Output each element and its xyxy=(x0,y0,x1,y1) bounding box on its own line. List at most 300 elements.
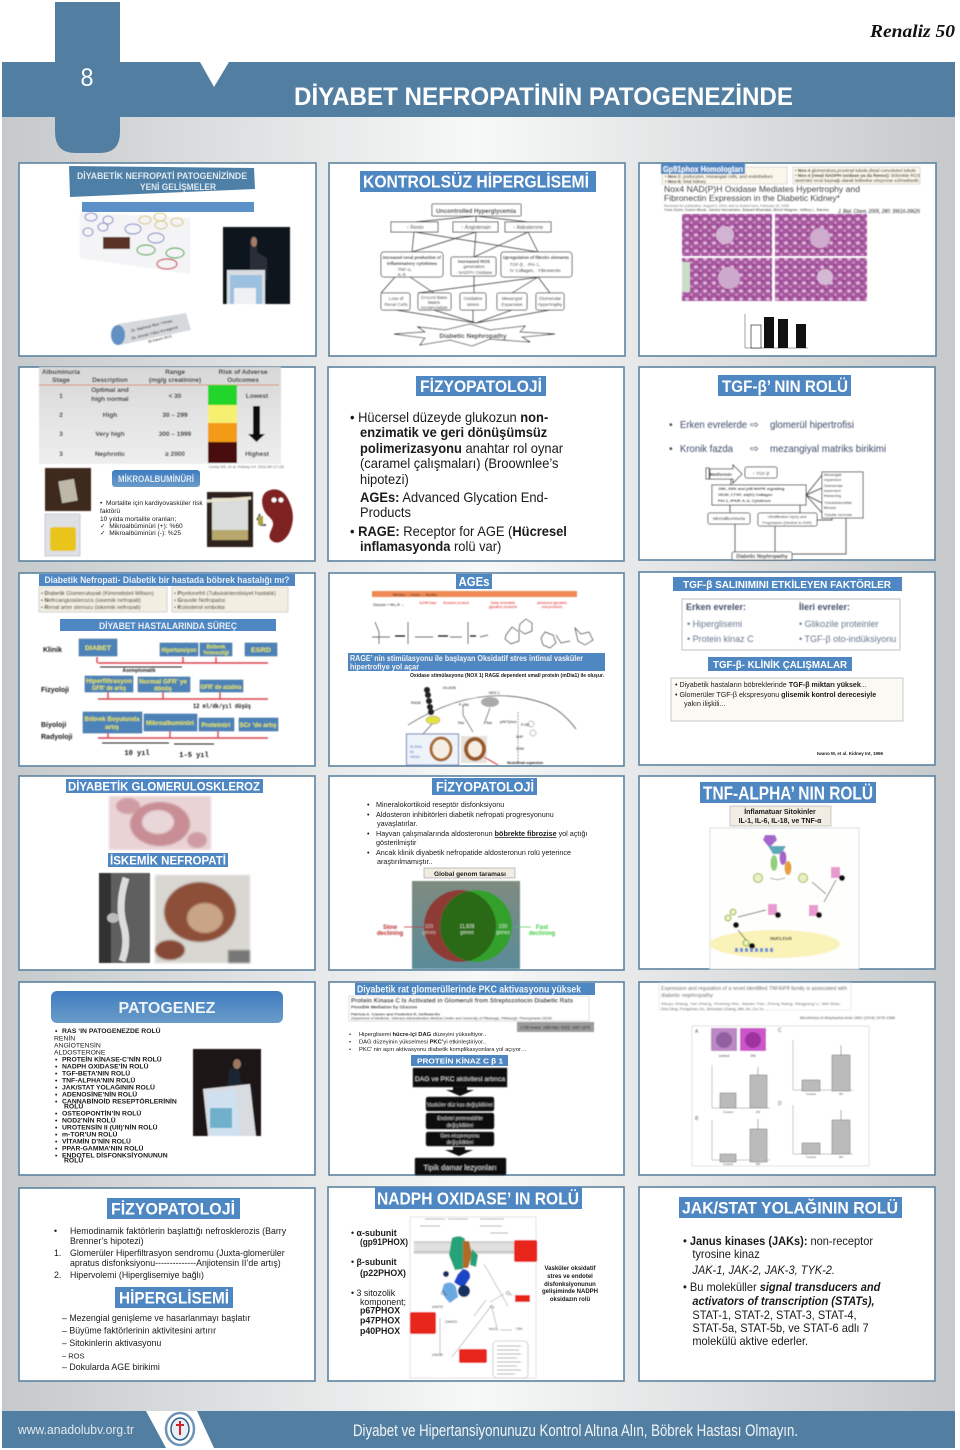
diagnosis boxes: • Piyelonefrit (Tubulointerstisiyel hastalık) xyxy=(174,591,276,597)
timeline: Proteinüri xyxy=(202,722,231,729)
histology image xyxy=(109,796,211,850)
albuminuria table: Stage xyxy=(52,377,70,384)
reaction scheme: end-products xyxy=(542,605,562,609)
vessel cross-sections xyxy=(406,721,543,765)
oxidase diagram: O₂ xyxy=(506,1291,512,1297)
heading: TGF-β’ NIN ROLÜ xyxy=(722,377,848,396)
flow: Endotel permeabilite xyxy=(437,1116,483,1122)
panel: new developments xyxy=(19,163,316,356)
paper citation: J Clin Invest. 1989 Mar; 83(3): 1667-1674 xyxy=(519,1025,590,1030)
albuminuria table: ≥ 2000 xyxy=(165,451,185,458)
subheading xyxy=(411,1055,508,1066)
oxidase diagram: ·OH xyxy=(515,1326,522,1331)
albuminuria table: 1 xyxy=(59,393,63,400)
panel: PKC activation xyxy=(329,982,624,1175)
pathway diagram: Mesangial xyxy=(824,473,841,477)
homolog notes xyxy=(661,163,920,184)
reaction scheme: glycation products xyxy=(489,605,517,609)
row labels xyxy=(41,647,73,741)
vessel cross-sections: Neointimal expansion xyxy=(507,761,543,765)
stage list: • xyxy=(669,420,673,431)
stage list: glomerül hipertrofisi xyxy=(770,420,854,431)
side note xyxy=(542,1266,598,1303)
effects list: – Mezengial genişleme ve hasarlanmayı başlatır xyxy=(62,1313,250,1323)
albuminuria table: Lowest xyxy=(246,393,269,400)
venn diagram: 329 xyxy=(425,924,433,930)
heading xyxy=(51,991,283,1023)
charts figure: C xyxy=(778,1028,782,1034)
charts figure xyxy=(692,1026,869,1166)
list: • xyxy=(55,1056,58,1064)
numbered list: Glomerüler Hiperfiltrasyon sendromu (Juxta-glomerüler xyxy=(70,1248,285,1258)
timeline: Böbrek xyxy=(207,644,226,650)
homolog notes: • Nox-4 (renal NADPH oxidase ya da Renox): Böbrekte ROS xyxy=(795,173,920,178)
pathway diagram: Tubular necrosis xyxy=(824,513,852,517)
timeline: Böbrek Boyutunda xyxy=(84,716,140,723)
albuminuria table: (mg/g creatinine) xyxy=(149,377,201,384)
albuminuria table: Nephrotic xyxy=(95,451,126,458)
body text: • RAGE: Receptor for AGE (Hücresel xyxy=(350,523,567,539)
body text: polimerizasyonu anahtar rol oynar xyxy=(360,440,564,456)
stage list: • xyxy=(669,444,673,455)
process heading: DİYABET HASTALARINDA SÜREÇ xyxy=(99,621,237,631)
list: ROLÜ xyxy=(64,1156,83,1164)
timeline: ESRD xyxy=(251,647,271,654)
mortality text: faktörü xyxy=(100,508,120,515)
homolog notes: • Nox-1: podocytes, mesangial cells, and endothelium xyxy=(665,174,773,179)
subunit list: p67PHOX xyxy=(360,1306,400,1316)
panel: aldosterone pathophysiology xyxy=(329,776,624,970)
badge: MİKROALBUMİNÜRİ xyxy=(118,474,194,484)
oxidase diagram: O₂ xyxy=(490,1304,495,1309)
panel: hemodynamic pathophysiology xyxy=(19,1188,315,1381)
albuminuria table: Range xyxy=(165,369,185,376)
vessel cross-sections: SHP xyxy=(516,735,524,739)
albuminuria table: High xyxy=(103,412,117,419)
bullets: • xyxy=(367,848,370,857)
body text: (caramel çalışmaları) (Broownlee’s xyxy=(360,455,559,471)
factor box xyxy=(682,599,900,650)
pathway diagram: PAI-1, tPAIP, IL-6, Cytokines xyxy=(718,498,771,503)
vessel cross-sections: STAT xyxy=(516,747,525,751)
body text: inflamasyonda rolü var) xyxy=(360,538,501,554)
flowchart: Loss of xyxy=(389,296,404,301)
numbered list: Brenner’s hipotezi) xyxy=(70,1236,144,1246)
cytokine label xyxy=(730,806,831,826)
paper title: Nox4 NAD(P)H Oxidase Mediates Hypertrophy and xyxy=(664,184,860,194)
flowchart: ↑ Aldosterone xyxy=(513,225,543,231)
panel: TNFAIP8 charts xyxy=(639,982,935,1175)
numbered list: Hemodinamik faktörlerin başlattığı nefrosklerozis (Barry xyxy=(70,1226,287,1236)
flowchart: Matrix xyxy=(428,300,441,305)
factor box: • TGF-β oto-indüksiyonu xyxy=(799,634,896,644)
factor box: • Glikozile proteinler xyxy=(799,619,879,629)
flowchart: ↑ Angiotensin xyxy=(461,225,491,231)
list: UROTENSİN II (UII)’NİN ROLÜ xyxy=(62,1122,158,1132)
paper citation: Department of Medicine, Veterans Administration Medical Center and University of Pittsburgh, Pittsburgh, Pennsylvania 15240 xyxy=(351,1016,552,1020)
albuminuria table: < 30 xyxy=(169,393,182,400)
homolog notes: • Nox-4 glomeruluss,proximal tubule,distal convoluted tubule xyxy=(795,168,916,173)
signalling figure xyxy=(710,828,859,969)
charts figure: control xyxy=(719,1054,729,1058)
stage list: ⇨ xyxy=(750,444,759,455)
flow: değişiklikleri xyxy=(447,1123,473,1129)
timeline: GFR' de azalma xyxy=(200,684,242,691)
author label: Dr. Ahmet Yıldız-Kınagevsi xyxy=(131,324,178,341)
panel: role of TGF-beta xyxy=(639,367,935,560)
bullets: Hayvan çalışmalarında aldosteronun böbrekte fibrozise yol açtığı xyxy=(376,829,587,838)
flowchart: inflammatory cytokines xyxy=(387,261,438,266)
list: ALDOSTERONE xyxy=(54,1050,106,1056)
flow: Tipik damar lezyonları xyxy=(423,1163,497,1172)
author label: Dr. Mahmut İlker Yılmaz xyxy=(130,318,173,333)
flowchart: Hypertrophy xyxy=(538,302,563,307)
number tab xyxy=(55,2,120,153)
albuminuria table xyxy=(39,367,285,469)
panel: diabetic process timeline xyxy=(19,573,315,766)
subunit list: p47PHOX xyxy=(360,1316,400,1326)
banner: YENİ GELİŞMELER xyxy=(140,182,216,192)
flow: değişiklikleri xyxy=(447,1140,473,1146)
bullets: • xyxy=(349,1040,351,1046)
page number: 8 xyxy=(80,64,94,92)
numbered list xyxy=(54,1226,287,1280)
heading: KONTROLSÜZ HİPERGLİSEMİ xyxy=(363,172,589,192)
cytokine label: IL-1, IL-6, IL-18, ve TNF-α xyxy=(739,818,822,825)
vessel cross-sections: mDia1 xyxy=(410,755,420,759)
heading: NADPH OXIDASE’ IN ROLÜ xyxy=(377,1188,579,1208)
side note: oksidazın rolü xyxy=(550,1297,591,1303)
venn diagram: Fast xyxy=(536,925,548,931)
kidney character xyxy=(257,489,293,543)
speaker photo xyxy=(223,227,290,304)
banner xyxy=(69,166,255,197)
body text: hipotezi) xyxy=(360,471,409,487)
panel: pathogenesis list xyxy=(19,982,315,1175)
list: RAS ‘IN PATOGENEZDE ROLÜ xyxy=(62,1026,161,1035)
reaction scheme xyxy=(372,591,593,648)
body text: enzimatik ve geri dönüşümsüz xyxy=(360,424,547,440)
bullets xyxy=(349,1032,527,1053)
reaction scheme: Amadori product xyxy=(443,601,469,605)
oxidase note: Oxidase stimülasyonu (NOX 1) RAGE dependent small protein (mDia1) ile oluşur. xyxy=(410,673,604,679)
pathway diagram: expansion xyxy=(824,478,841,482)
list: • xyxy=(55,1146,58,1152)
RAGE heading xyxy=(348,653,605,672)
charts figure: Control xyxy=(723,1110,733,1114)
mortality text xyxy=(100,500,203,537)
homolog notes: üretimini renal kaynağı olarak böbrekte ekspirese edilmektedir. xyxy=(795,178,920,183)
page title: DİYABET NEFROPATİNİN PATOGENEZİNDE xyxy=(294,83,793,111)
flow: DAG ve PKC aktivitesi artınca xyxy=(415,1076,505,1083)
paper citation: Patricia A. Craven and Frederick R. DeRubertis xyxy=(351,1012,441,1016)
bullets: • xyxy=(349,1047,351,1053)
body text: molekülü aktive ederler. xyxy=(692,1336,808,1348)
mortality text: 10 yılda mortalite oranları; xyxy=(100,516,176,523)
albuminuria table: Description xyxy=(92,377,128,384)
list: • xyxy=(55,1152,58,1160)
list: ANGİOTENSİN xyxy=(54,1040,101,1050)
author label xyxy=(111,313,191,345)
body text: • Janus kinases (JAKs): non-receptor xyxy=(683,1236,873,1248)
RAGE signalling diagram: NOX 1 xyxy=(489,691,500,695)
venn diagram: Slow xyxy=(383,925,397,931)
urine cup photo xyxy=(207,492,253,547)
pathway diagram: Glomerular xyxy=(824,484,844,488)
list: ADENOSİNE’NİN ROLÜ xyxy=(62,1090,137,1098)
footer band xyxy=(2,1411,955,1448)
bullets: araştırılmamıştır.. xyxy=(377,857,433,866)
angiography image xyxy=(99,873,150,963)
albuminuria table: Optimal and xyxy=(91,387,129,394)
flowchart: Oxidative xyxy=(464,296,483,301)
pathway diagram: Metformin xyxy=(710,472,732,477)
flowchart: Upregulation of fibrotic elements xyxy=(503,255,569,260)
effects list: – Büyüme faktörlerinin aktivitesini artırır xyxy=(62,1326,216,1336)
mortality text: ✓ Mikroalbüminüri (-): %25 xyxy=(100,530,181,537)
flowchart: · IL-6 xyxy=(395,272,406,277)
pathway diagram: fibrosis xyxy=(824,506,836,510)
venn diagram: genes xyxy=(496,930,510,936)
clinical box: yakın ilişkili... xyxy=(684,700,725,708)
citation: Iwano M, et al. Kidney Int, 1996 xyxy=(817,751,884,756)
factor box: • Hiperglisemi xyxy=(687,619,742,629)
author label: 30 Kasım 2013 xyxy=(148,334,172,344)
paper citation: Biochimica et Biophysica Acta 1862 (2016) 1978-1988 xyxy=(800,1015,896,1020)
charts figure: DN xyxy=(750,1054,756,1058)
pathway diagram: Ultrafiltration injury and xyxy=(768,515,806,519)
diagnosis boxes: • Nefroangiosklerozis (iskemik nefropati) xyxy=(41,598,141,604)
venn diagram: declining xyxy=(377,931,403,937)
clinical box xyxy=(671,678,903,721)
bullets xyxy=(367,800,587,866)
timeline: 1-5 yıl xyxy=(179,752,209,760)
list: VİTAMİN D’NİN ROLÜ xyxy=(62,1136,131,1146)
venn diagram: genes xyxy=(422,930,436,936)
bullets: Aldosteron inhibitörleri diabetik nefropati progresyonunu xyxy=(376,810,554,819)
reaction scheme: advanced glycation xyxy=(537,601,567,605)
albuminuria table: Risk of Adverse xyxy=(219,369,268,376)
body text xyxy=(683,1236,881,1348)
header notch xyxy=(200,62,229,87)
timeline: DIABET xyxy=(85,645,111,652)
subunit list: (gp91PHOX) xyxy=(360,1237,408,1247)
reaction scheme: Early reversible xyxy=(491,601,515,605)
RAGE signalling diagram: P-JNK xyxy=(459,703,470,707)
paper citation: Protein Kinase C Is Activated in Glomeruli from Streptozotocin Diabetic Rats xyxy=(351,998,574,1004)
charts figure: DN xyxy=(839,1092,843,1096)
pathway diagram: basement xyxy=(824,489,842,493)
vessel cross-sections: SI RNA xyxy=(410,745,422,749)
flowchart: Expansion xyxy=(501,302,523,307)
paper citation: Expression and regulation of a novel identified TNFAIP8 family is associated with xyxy=(661,986,847,992)
genome label xyxy=(424,868,515,878)
RAGE signalling diagram: RAGE xyxy=(411,701,422,705)
body text: tyrosine kinaz xyxy=(692,1249,760,1261)
panel: NADPH oxidase xyxy=(328,1187,624,1381)
row labels: Fizyoloji xyxy=(41,687,69,694)
charts figure: Control xyxy=(806,1092,816,1096)
RAGE signalling diagram: Rac xyxy=(486,721,492,725)
pathway diagram xyxy=(706,465,863,560)
effects list: – Dokularda AGE birikimi xyxy=(62,1362,160,1372)
timeline: 10 yıl xyxy=(124,750,150,758)
body text: Products xyxy=(360,504,411,520)
flowchart: Mesangial xyxy=(502,296,522,301)
bullets: Ancak klinik diyabetik nefropatide aldosteronun rolü yeterince xyxy=(376,848,571,857)
panel: pathophysiology AGEs xyxy=(328,367,624,561)
heading: Diabetik Nefropati- Diabetik bir hastada böbrek hastalığı mı? xyxy=(44,575,290,585)
RAGE heading: hipertrofiye yol açar xyxy=(350,662,419,672)
row labels: Radyoloji xyxy=(41,734,73,741)
body text: activators of transcription (STATs), xyxy=(692,1296,875,1308)
stage list: mezangiyal matriks birikimi xyxy=(770,444,886,455)
albuminuria table: Very high xyxy=(95,431,125,438)
bullets: • xyxy=(349,1032,351,1038)
charts figure: DN xyxy=(839,1155,843,1159)
bullets: PKC’ nin aşırı aktivasyonu diabetik komplikasyonlara yol açıyor… xyxy=(359,1047,527,1053)
list: • xyxy=(55,1124,58,1132)
paper citation: Sha Ding, Pengchao Jin, Jinhuiyao Zhang, Mei Jin, Gu Yu xyxy=(661,1006,764,1011)
flowchart: stress xyxy=(467,302,480,307)
albuminuria table: 30 – 299 xyxy=(162,412,188,419)
side note: stres ve endotel xyxy=(547,1274,593,1280)
footer url: www.anadolubv.org.tr xyxy=(17,1423,134,1437)
body text: STAT-5a, STAT-5b, ve STAT-6 adlı 7 xyxy=(692,1323,869,1335)
oxidase diagram: ONOO xyxy=(445,1319,457,1324)
side note: Vasküler oksidatif xyxy=(544,1266,597,1272)
heading: TNF-ALPHA’ NIN ROLÜ xyxy=(703,782,873,804)
paper citation: Possible Mediation by Glucose xyxy=(351,1004,418,1010)
charts figure: DN xyxy=(756,1162,760,1166)
mortality text: ✓ Mikroalbüminüri (+): %60 xyxy=(100,523,183,530)
subunit list xyxy=(351,1228,408,1336)
panel: glomerulosclerosis xyxy=(19,776,315,970)
stage list xyxy=(669,420,886,455)
paper title: Received for publication, August 6, 2004, and in revised form, February 18, 2005 xyxy=(664,204,789,208)
timeline: Hipertansiyon xyxy=(162,647,197,654)
flowchart: Increased renal production of xyxy=(383,255,441,260)
row labels: Klinik xyxy=(43,647,62,654)
list: • xyxy=(55,1110,58,1118)
list: • xyxy=(55,1078,58,1084)
flowchart: ↑ Renin xyxy=(407,225,424,231)
venn diagram: 11,828 xyxy=(460,924,475,930)
oxidase diagram: O₂ xyxy=(441,1291,447,1297)
charts figure: D xyxy=(778,1101,782,1107)
stage list: Erken evrelerde xyxy=(680,420,747,431)
list: • xyxy=(55,1098,58,1106)
oxidase diagram: eNOS xyxy=(432,1304,443,1309)
timeline: 12 ml/dk/yıl düşüş xyxy=(193,703,251,710)
effects list xyxy=(62,1313,250,1372)
subunit list: • α-subunit xyxy=(351,1228,397,1238)
heading: FİZYOPATOLOJİ xyxy=(420,377,542,396)
albuminuria table: Albuminuria xyxy=(42,369,80,376)
heading: PATOGENEZ xyxy=(119,1000,216,1017)
row labels: Biyoloji xyxy=(41,722,66,729)
mortality text: • Mortalite için kardiyovasküler risk xyxy=(100,500,203,507)
albuminuria table: Highest xyxy=(245,451,270,458)
albuminuria table: 3 xyxy=(59,431,63,438)
oxidase diagram xyxy=(410,1217,537,1378)
stage list: Kronik fazda xyxy=(680,444,733,455)
numbered list: Hipervolemi (Hiperglisemiye bağlı) xyxy=(70,1270,204,1280)
patient sample photos xyxy=(45,468,91,556)
flowchart: Renal Cells xyxy=(384,302,408,307)
flowchart xyxy=(381,204,572,346)
timeline: Asemptomatik xyxy=(122,668,156,674)
list: • xyxy=(55,1132,58,1138)
heading: Diyabetik rat glomerüllerinde PKC aktivasyonu yüksek xyxy=(357,984,581,996)
side note: disfonksiyonunun xyxy=(544,1282,596,1288)
pathway diagram: Tubulointerstitial xyxy=(824,501,852,505)
pathway diagram: VEGF, CTGF, α3(IV) Collagen xyxy=(718,492,773,497)
bullets: Hiperglisemi hücre-içi DAG düzeyini yükseltiyor.. xyxy=(359,1032,486,1038)
charts figure: Control xyxy=(723,1162,733,1166)
diagnosis boxes: • Gravide Nefropatisi xyxy=(174,598,225,604)
panel: TGF-beta factors xyxy=(639,572,935,765)
numbered list: 2. xyxy=(54,1270,61,1280)
blue bar xyxy=(82,202,254,212)
body text: JAK-1, JAK-2, JAK-3, TYK-2. xyxy=(691,1265,835,1277)
panel: uncontrolled hyperglycemia xyxy=(329,163,625,356)
side note: gelişiminde NADPH xyxy=(542,1289,598,1295)
flowchart: · TGF-β, · PAI-1, xyxy=(507,262,540,267)
paper title xyxy=(664,184,921,215)
list: TNF-ALPHA’NIN ROLÜ xyxy=(62,1076,135,1084)
panel: AGEs xyxy=(329,573,624,766)
list: • xyxy=(55,1138,58,1146)
bullets: Mineralokortikoid reseptör disfonksiyonu xyxy=(376,800,504,809)
subunit list: komponent; xyxy=(360,1297,406,1307)
albuminuria table: 2 xyxy=(59,412,63,419)
footer logo xyxy=(166,1413,194,1445)
heading: FİZYOPATOLOJİ xyxy=(436,780,534,794)
charts figure: A xyxy=(695,1029,699,1035)
list: • xyxy=(55,1064,58,1070)
pathway diagram: Microalbuminuria xyxy=(713,516,746,521)
paper title: J. Biol. Chem. 2005, 280: 39616-39626 xyxy=(837,209,921,215)
genome label: Global genom taraması xyxy=(434,871,506,878)
list: PROTEİN KİNASE-C’NİN ROLÜ xyxy=(62,1054,162,1064)
RAGE signalling diagram: pAKTphos xyxy=(500,720,517,724)
list: CANNABİNOİD RESEPTÖRLERİNİN xyxy=(62,1096,177,1106)
timeline: GFR' de artış xyxy=(92,685,126,692)
list: RENİN xyxy=(54,1034,75,1042)
timeline: Yetmezliği xyxy=(203,650,229,656)
effects list: – Sitokinlerin aktivasyonu xyxy=(62,1338,161,1348)
panel: microalbuminuria xyxy=(19,367,315,561)
diagnosis boxes xyxy=(39,587,288,612)
heading: TGF-β SALINIMINI ETKİLEYEN FAKTÖRLER xyxy=(683,578,891,591)
body text: STAT-1, STAT-2, STAT-3, STAT-4, xyxy=(692,1310,857,1322)
paper citation: diabetic nephropathy xyxy=(661,993,713,999)
flowchart: · IV Collagen, · Fibronectin xyxy=(507,268,561,273)
venn diagram: declining xyxy=(529,931,555,937)
charts figure: Control xyxy=(806,1155,816,1159)
vessel cross-sections: for xyxy=(410,750,415,754)
flowchart: generation xyxy=(463,264,485,269)
albuminuria table: Levey AS, et al. Kidney Int. 2011;80:17-28. xyxy=(209,464,285,469)
flowchart: Glomerular xyxy=(539,296,562,301)
clinical studies heading: TGF-β- KLİNİK ÇALIŞMALAR xyxy=(713,658,847,671)
pathway diagram: ↑ TGF-β xyxy=(753,471,770,476)
oxidase diagram: H₂O₂ xyxy=(489,1326,499,1331)
clinical box: • Diyabetik hastaların böbreklerinde TGF-β miktarı yüksek... xyxy=(675,681,867,689)
badge xyxy=(112,470,200,487)
bullets: • xyxy=(367,829,370,838)
